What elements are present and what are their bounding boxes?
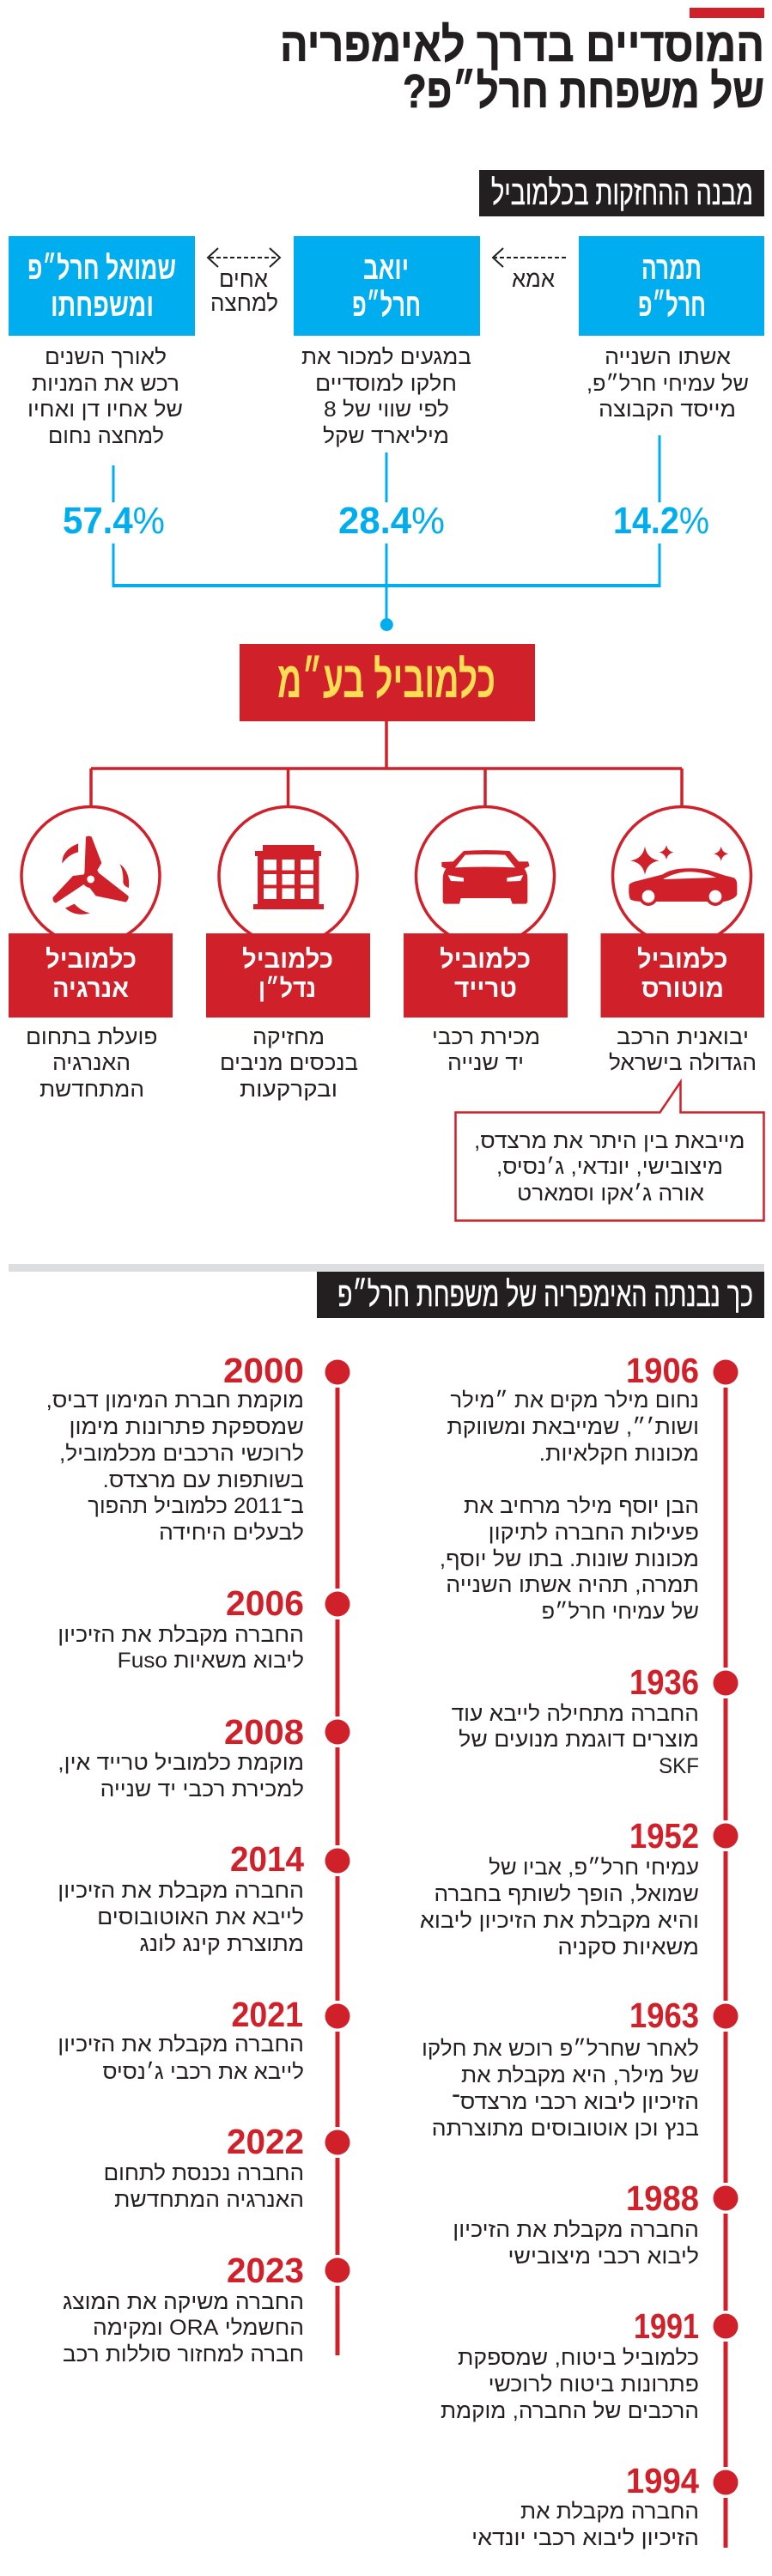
timeline entry: 2021: לייבא את רכבי ג׳נסיס bbox=[103, 2060, 304, 2084]
timeline entry: 2021: 2021 bbox=[232, 1995, 303, 2034]
timeline entry: 2021 bbox=[58, 1995, 304, 2084]
timeline entry: 1991 bbox=[441, 2306, 699, 2423]
timeline entry: 1963: הזיכיון ליבוא רכבי מרצדס־ bbox=[452, 2090, 699, 2114]
panel: Colmobil Real Estate: נדל״ן bbox=[258, 975, 316, 1003]
panel: Tamar Harlap: תמרה bbox=[641, 251, 702, 287]
text: Tamar description: מייסד הקבוצה bbox=[599, 398, 736, 422]
timeline entry: 1994: החברה מקבלת את bbox=[520, 2500, 699, 2524]
timeline entry: 2006 bbox=[58, 1583, 304, 1673]
timeline entry: 2000: בשותפות עם מרצדס. bbox=[103, 1468, 304, 1492]
timeline entry: 1952 bbox=[420, 1816, 699, 1959]
timeline entry: 2023: 2023 bbox=[227, 2251, 304, 2290]
timeline entry: 1994: הזיכיון ליבוא רכבי יונדאי bbox=[471, 2526, 699, 2550]
timeline entry: 2008: מוקמת כלמוביל טרייד אין, bbox=[58, 1751, 304, 1775]
panel: Colmobil Motors: מוטורס bbox=[641, 975, 724, 1003]
panel: Colmobil Motors: כלמוביל bbox=[637, 945, 728, 974]
timeline entry: 1988: 1988 bbox=[626, 2178, 699, 2218]
timeline entry: 2022: החברה נכנסת לתחום bbox=[104, 2161, 304, 2185]
panel: Colmobil Real Estate: כלמוביל bbox=[242, 945, 333, 974]
panel: Yoav Harlap: חרל״פ bbox=[352, 288, 421, 324]
timeline entry: 2014: 2014 bbox=[230, 1839, 304, 1879]
timeline entry: 2022 bbox=[104, 2122, 304, 2212]
timeline entry: 1988: החברה מקבלת את הזיכיון bbox=[453, 2218, 699, 2242]
text: Yoav description: מיליארד שקל bbox=[323, 424, 449, 448]
callout: imported brands: מיצובישי, יונדאי, ג׳נסיס, bbox=[496, 1155, 723, 1179]
timeline entry: 1936: החברה מתחילה לייבא עוד bbox=[452, 1702, 699, 1726]
timeline axis: right column bbox=[713, 1360, 739, 2548]
panel: Shmuel Harlap and family: שמואל חרל״פ bbox=[27, 251, 176, 287]
panel: Colmobil Motors bbox=[601, 807, 764, 1075]
text: Shmuel description: רכש את המניות bbox=[32, 372, 179, 396]
timeline entry: 1952: שמואל, הופך לשותף בחברה bbox=[435, 1882, 699, 1906]
timeline entry: 1906: מכונות חקלאיות. bbox=[539, 1442, 699, 1466]
icon: car front bbox=[441, 850, 530, 904]
text: Yoav description: חלקו למוסדיים bbox=[315, 372, 457, 396]
text: Yoav description bbox=[301, 345, 471, 448]
icon: building bbox=[253, 845, 324, 909]
text: Real Estate description: מחזיקה bbox=[252, 1025, 325, 1049]
panel: Colmobil Energy: אנרגיה bbox=[52, 975, 129, 1003]
text: Motors description: הגדולה בישראל bbox=[609, 1051, 757, 1075]
stat: 28.4%: 28.4% bbox=[338, 500, 445, 542]
timeline entry: 2006: 2006 bbox=[226, 1583, 304, 1623]
text: Energy description bbox=[26, 1025, 158, 1102]
text: Shmuel description: למחצה נחום bbox=[48, 424, 164, 448]
text: Shmuel description: של אחיו דן ואחיו bbox=[27, 398, 183, 422]
timeline entry: 1906 bbox=[440, 1351, 699, 1624]
timeline entry: 2022: האנרגיה המתחדשת bbox=[114, 2188, 304, 2212]
text: Energy description: פועלת בתחום bbox=[26, 1025, 158, 1049]
arrow: mother relation: אמא bbox=[512, 266, 555, 292]
timeline entry: 1906: הבן יוסף מילר מרחיב את bbox=[464, 1494, 699, 1518]
panel: Yoav Harlap bbox=[294, 236, 480, 336]
text: Real Estate description: בנכסים מניבים bbox=[220, 1051, 358, 1075]
panel: Shmuel Harlap and family: ומשפחתו bbox=[51, 288, 154, 324]
text: Shmuel description bbox=[27, 345, 183, 448]
callout: imported brands bbox=[455, 1082, 764, 1221]
panel: Colmobil Real Estate bbox=[206, 807, 370, 1102]
timeline entry: 1963: של מילר, היא מקבלת את bbox=[461, 2063, 699, 2087]
arrow: half brothers relation bbox=[208, 248, 280, 316]
text: Trade description bbox=[432, 1025, 540, 1075]
text: Shmuel description: לאורך השנים bbox=[45, 345, 167, 369]
timeline entry: 1991: הרכבים של החברה, מוקמת bbox=[441, 2399, 699, 2423]
timeline entry: 2014 bbox=[58, 1839, 304, 1956]
timeline entry: 1906: 1906 bbox=[626, 1351, 699, 1390]
callout: imported brands: מייבאת בין היתר את מרצדס, bbox=[474, 1129, 745, 1153]
timeline entry: 1936: SKF bbox=[659, 1754, 699, 1778]
panel: Colmobil Ltd: כלמוביל בע״מ bbox=[277, 651, 495, 708]
timeline entry: 2022: 2022 bbox=[227, 2122, 304, 2161]
timeline entry: 2000: ב־2011 כלמוביל תהפוך bbox=[88, 1494, 304, 1518]
timeline entry: 2006: החברה מקבלת את הזיכיון bbox=[58, 1623, 304, 1647]
timeline entry: 1952: משאיות סקניה bbox=[557, 1935, 699, 1959]
timeline entry: 1906: תמרה, תהיה אשתו השנייה bbox=[446, 1573, 699, 1597]
timeline entry: 1952: 1952 bbox=[629, 1816, 699, 1856]
timeline entry: 1963: לאחר שחרל״פ רוכש את חלקו bbox=[422, 2037, 699, 2061]
connector: blue ownership lines bbox=[112, 435, 661, 631]
timeline entry: 2008: 2008 bbox=[224, 1712, 304, 1752]
timeline entry: 2014: לייבא את האוטובוסים bbox=[97, 1905, 304, 1929]
timeline entry: 1988: ליבוא רכבי מיצובישי bbox=[508, 2245, 699, 2269]
panel: Colmobil Ltd bbox=[240, 644, 535, 721]
panel: Colmobil Energy: כלמוביל bbox=[46, 945, 137, 974]
timeline entry: 2023 bbox=[63, 2251, 304, 2366]
timeline entry: 1991: פתרונות ביטוח לרוכשי bbox=[489, 2372, 699, 2397]
timeline entry: 1952: והיא מקבלת את הזיכיון ליבוא bbox=[420, 1909, 699, 1933]
timeline entry: 2023: חברה למחזור סוללות רכב bbox=[63, 2342, 304, 2366]
panel: Colmobil Trade: טרייד bbox=[454, 975, 517, 1003]
timeline entry: 1991: 1991 bbox=[634, 2306, 699, 2346]
text: Tamar description: אשתו השנייה bbox=[605, 345, 731, 369]
panel: Tamar Harlap: חרל״פ bbox=[638, 288, 706, 324]
timeline entry: 2000: 2000 bbox=[223, 1351, 304, 1390]
panel: Tamar Harlap bbox=[579, 236, 764, 336]
connector: red subsidiary lines bbox=[91, 721, 682, 807]
timeline entry: 2006: ליבוא משאיות Fuso bbox=[118, 1649, 304, 1673]
panel: Shmuel Harlap and family bbox=[9, 236, 195, 336]
timeline entry: 1906: פעילות החברה לתיקון bbox=[489, 1521, 699, 1545]
text: Trade description: יד שנייה bbox=[447, 1051, 524, 1075]
timeline entry: 1963: בנץ וכן אוטובוסים מתוצרתה bbox=[432, 2117, 699, 2141]
panel: Colmobil Trade bbox=[404, 807, 568, 1075]
timeline entry: 1994: 1994 bbox=[626, 2461, 699, 2500]
timeline entry: 1906: נחום מילר מקים את ״מילר bbox=[450, 1388, 699, 1413]
timeline entry: 2000: מוקמת חברת המימון דביס, bbox=[46, 1388, 304, 1413]
timeline axis: left column bbox=[325, 1360, 350, 2355]
text: Motors description: יבואנית הרכב bbox=[617, 1025, 749, 1049]
title bbox=[280, 18, 764, 118]
stat: 57.4%: 57.4% bbox=[63, 500, 165, 542]
timeline entry: 2023: החשמלי ORA ומקימה bbox=[93, 2316, 304, 2340]
text: Motors description bbox=[609, 1025, 757, 1075]
arrow: half brothers relation: אחים bbox=[219, 266, 268, 292]
timeline entry: 1906: ושות׳״, שמייבאת ומשווקת bbox=[447, 1415, 699, 1439]
timeline entry: 1988 bbox=[453, 2178, 699, 2269]
timeline entry: 2000: לבעלים היחידה bbox=[159, 1521, 304, 1545]
text: Energy description: האנרגיה bbox=[52, 1051, 131, 1075]
timeline entry: 2000: שמספקת פתרונות מימון bbox=[69, 1415, 304, 1439]
text: Yoav description: לפי שווי של 8 bbox=[324, 398, 449, 422]
callout: imported brands: אורה ג׳אקו וסמארט bbox=[517, 1182, 704, 1206]
text: Tamar description bbox=[587, 345, 749, 422]
text: Energy description: המתחדשת bbox=[40, 1078, 144, 1102]
timeline entry: 1906: של עמיחי חרל״פ bbox=[541, 1600, 699, 1624]
arrow: half brothers relation: למחצה bbox=[210, 290, 278, 316]
timeline entry: 1963: 1963 bbox=[629, 1996, 699, 2035]
text: Real Estate description: ובקרקעות bbox=[240, 1078, 337, 1102]
timeline entry: 2000 bbox=[46, 1351, 304, 1545]
stat: 14.2%: 14.2% bbox=[613, 500, 709, 542]
panel: Colmobil Energy bbox=[9, 807, 173, 1102]
icon: wind turbine bbox=[52, 836, 129, 914]
timeline entry: 1936: מוצרים דוגמת מנועים של bbox=[459, 1728, 699, 1752]
timeline entry: 2021: החברה מקבלת את הזיכיון bbox=[58, 2032, 304, 2057]
section divider band bbox=[9, 1264, 764, 1272]
text: Real Estate description bbox=[220, 1025, 358, 1102]
timeline entry: 1936 bbox=[452, 1662, 699, 1778]
arrow: mother relation bbox=[493, 248, 566, 292]
timeline entry: 2014: מתוצרת קינג לונג bbox=[139, 1932, 304, 1956]
icon: shining car bbox=[629, 845, 737, 906]
timeline entry: 1991: כלמוביל ביטוח, שמספקת bbox=[458, 2346, 699, 2370]
timeline entry: 1952: עמיחי חרל״פ, אביו של bbox=[489, 1856, 699, 1880]
timeline entry: 2000: לרוכשי הרכבים מכלמוביל, bbox=[59, 1442, 304, 1466]
timeline entry: 2023: החברה משיקה את המוצג bbox=[63, 2290, 304, 2314]
text: Yoav description: במגעים למכור את bbox=[301, 345, 471, 369]
timeline entry: 1994 bbox=[471, 2461, 699, 2550]
timeline entry: 2014: החברה מקבלת את הזיכיון bbox=[58, 1879, 304, 1903]
text: Tamar description: של עמיחי חרל״פ, bbox=[587, 372, 749, 396]
timeline entry: 1936: 1936 bbox=[629, 1662, 699, 1702]
header accent bar bbox=[690, 8, 764, 18]
panel: Colmobil Trade: כלמוביל bbox=[440, 945, 531, 974]
timeline entry: 1963 bbox=[422, 1996, 699, 2141]
text: Trade description: מכירת רכבי bbox=[432, 1025, 540, 1049]
timeline entry: 2008: למכירת רכבי יד שנייה bbox=[100, 1777, 304, 1801]
timeline entry: 1906: מכונות שונות. בתו של יוסף, bbox=[440, 1547, 699, 1571]
timeline entry: 2008 bbox=[58, 1712, 304, 1801]
panel: Yoav Harlap: יואב bbox=[363, 251, 409, 287]
